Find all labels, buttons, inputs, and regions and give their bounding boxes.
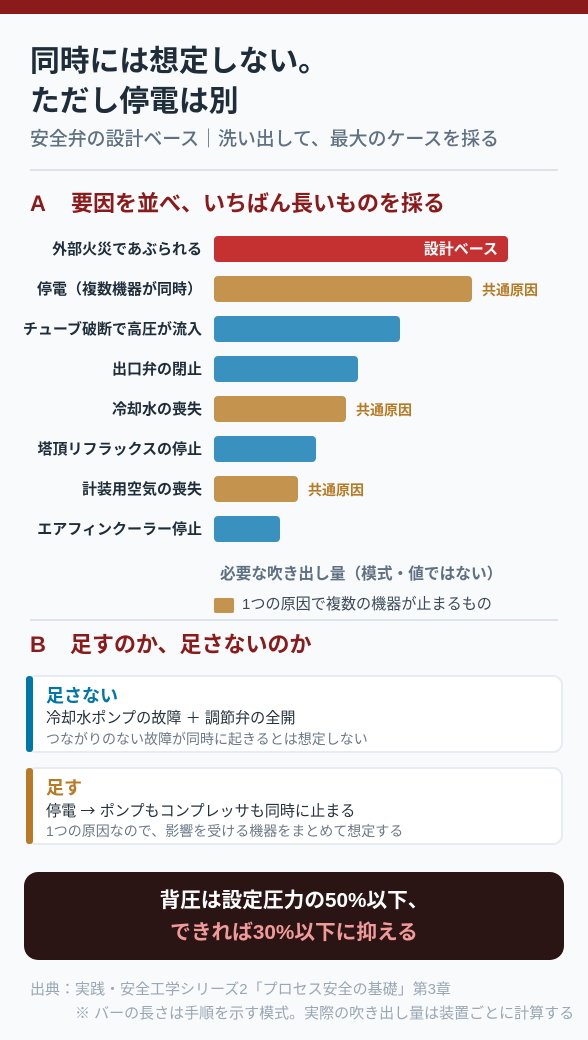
card: 足さない: 冷却水ポンプの故障 ＋ 調節弁の全開 <box>46 710 295 727</box>
legend text: 1つの原因で複数の機器が止まるもの <box>242 596 492 613</box>
row: 停電: 共通原因 <box>482 282 538 298</box>
section A heading: 要因を並べ、いちばん長いものを採る <box>71 191 445 216</box>
card: 足す: 停電 → ポンプもコンプレッサも同時に止まる <box>46 799 355 821</box>
row: 冷却水 <box>112 396 412 422</box>
legend <box>214 596 492 613</box>
card: 足さない: つながりのない故障が同時に起きるとは想定しない <box>46 731 368 747</box>
row: 塔頂リフラックス <box>37 436 316 462</box>
row: 計装用空気: 共通原因 <box>308 482 364 498</box>
legend swatch <box>214 598 234 613</box>
subtitle: 安全弁の設計ベース｜洗い出して、最大のケースを採る <box>30 129 499 150</box>
card: 足す: 1つの原因なので、影響を受ける機器をまとめて想定する <box>46 823 403 839</box>
top band <box>0 0 588 14</box>
row: チューブ破断: チューブ破断で高圧が流入 <box>23 321 202 338</box>
conclusion banner <box>24 872 564 960</box>
row: エアフィン <box>37 516 280 542</box>
card: 足さない: 足さない <box>46 686 118 706</box>
row: 冷却水: 共通原因 <box>356 402 412 418</box>
row: 外部火災: 外部火災であぶられる <box>52 241 202 258</box>
card: 足さない <box>26 675 563 753</box>
banner text: できれば30%以下に抑える <box>170 921 418 944</box>
bar chart <box>23 236 538 542</box>
row: 出口弁 <box>112 356 358 382</box>
row: 外部火災: 設計ベース <box>424 241 498 258</box>
card: 足す <box>26 767 563 845</box>
card: 足す: 足す <box>46 778 82 798</box>
source note: ※ バーの長さは手順を示す模式。実際の吹き出し量は装置ごとに計算する <box>75 1005 574 1022</box>
row: 停電 <box>37 276 538 302</box>
section A heading: A <box>30 191 46 216</box>
title: ただし停電は別 <box>30 85 239 118</box>
source note: 出典：実践・安全工学シリーズ2「プロセス安全の基礎」第3章 <box>30 981 451 998</box>
row: 計装用空気 <box>82 476 364 502</box>
row: エアフィン: エアフィンクーラー停止 <box>37 521 202 538</box>
row: 出口弁: 出口弁の閉止 <box>112 361 202 378</box>
title <box>30 45 328 118</box>
banner text <box>160 889 428 944</box>
title: 同時には想定しない。 <box>30 45 328 78</box>
row: 塔頂リフラックス: 塔頂リフラックスの停止 <box>37 441 202 458</box>
axis caption: 必要な吹き出し量（模式・値ではない） <box>220 566 502 583</box>
row: 冷却水: 冷却水の喪失 <box>112 401 202 418</box>
row: 外部火災 <box>52 236 508 262</box>
section B heading: B <box>30 632 46 657</box>
row: チューブ破断 <box>23 316 400 342</box>
row: 計装用空気: 計装用空気の喪失 <box>82 481 202 498</box>
source note <box>30 981 574 1022</box>
banner text: 背圧は設定圧力の50%以下、 <box>160 889 428 912</box>
section B heading: 足すのか、足さないのか <box>70 632 312 657</box>
row: 停電: 停電（複数機器が同時） <box>37 281 202 298</box>
